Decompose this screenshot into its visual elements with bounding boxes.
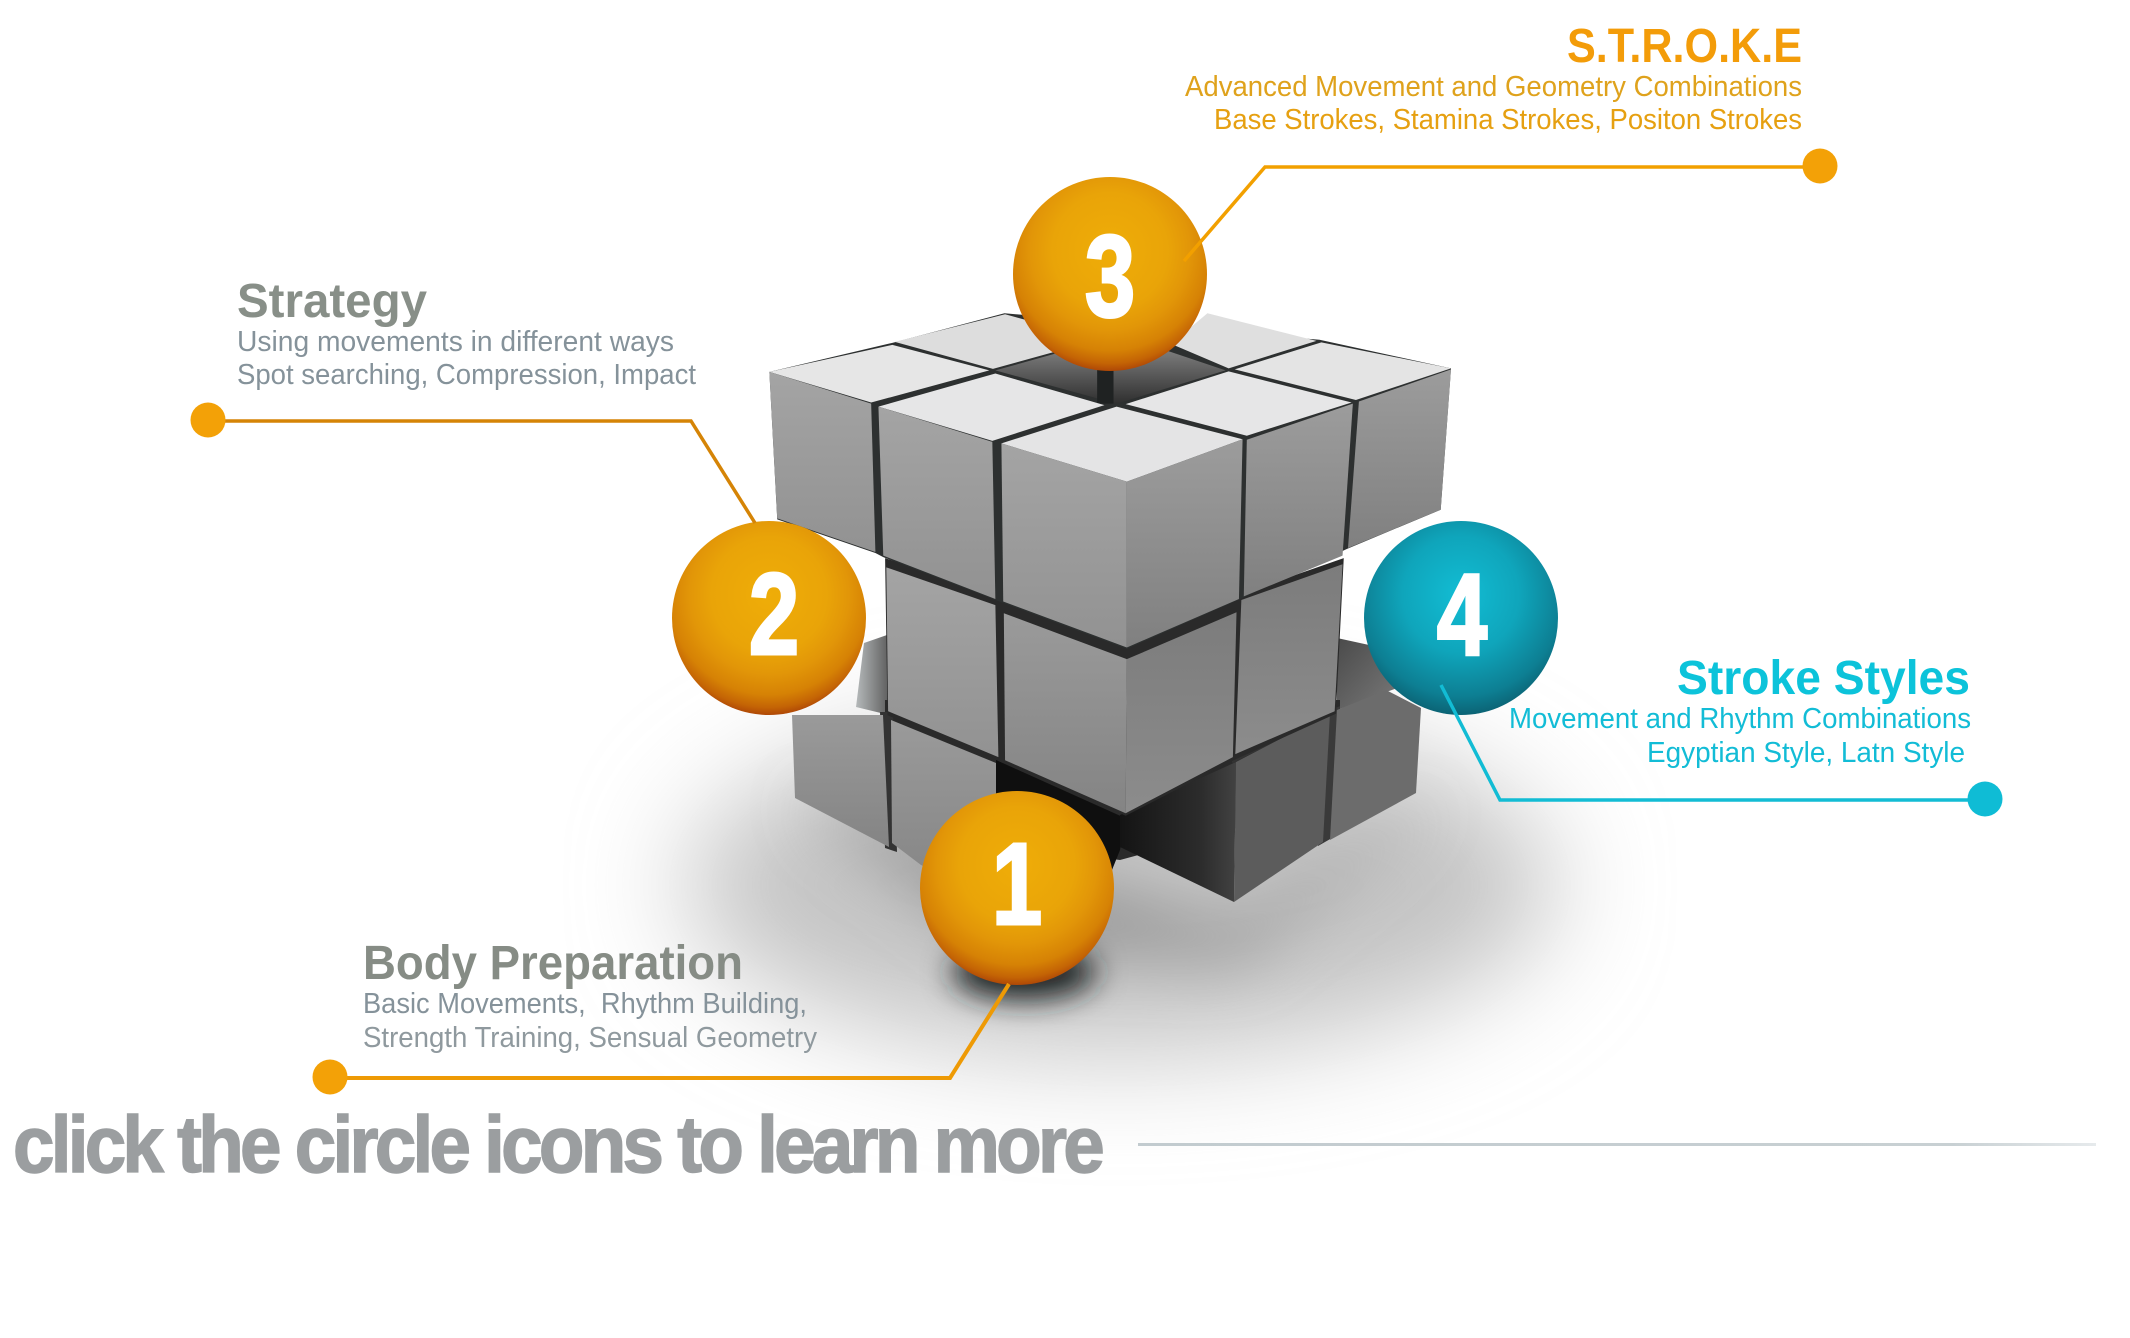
label: S.T.R.O.K.E: Base Strokes, Stamina Strokes, Positon Strokes [1214, 104, 1802, 136]
label: Strategy: Using movements in different ways [237, 326, 674, 358]
connector 4 [1441, 685, 2002, 816]
connector 2 [190, 402, 755, 523]
sphere 4 [1364, 521, 1558, 715]
label: Stroke Styles: Movement and Rhythm Combinations [1509, 703, 1971, 735]
label: Strategy [237, 275, 696, 391]
icon: 3D cube [769, 313, 1451, 902]
connector 1 [312, 984, 1009, 1094]
connector 3 [1184, 148, 1838, 261]
label: Strategy: Spot searching, Compression, Impact [237, 359, 696, 391]
call to action: click the circle icons to learn more [13, 1100, 1102, 1189]
sphere 2 [672, 521, 866, 715]
label: Body Preparation: Body Preparation [363, 937, 743, 990]
label: S.T.R.O.K.E: S.T.R.O.K.E [1567, 20, 1802, 73]
sphere 3 [1013, 177, 1207, 371]
label: Stroke Styles: Stroke Styles [1677, 652, 1970, 705]
number 2: 2 [749, 550, 799, 680]
label: S.T.R.O.K.E: Advanced Movement and Geometry Combinations [1185, 71, 1802, 103]
label: Stroke Styles [1509, 652, 1971, 769]
sphere 1 [920, 791, 1114, 985]
shadow under sphere 1 [952, 944, 1096, 1000]
label: Body Preparation [363, 937, 817, 1054]
number 3: 3 [1085, 212, 1135, 342]
number 4: 4 [1437, 551, 1487, 681]
label: Body Preparation: Strength Training, Sensual Geometry [363, 1022, 817, 1054]
label: Strategy: Strategy [237, 275, 427, 328]
cube top layer [769, 313, 1451, 649]
cube middle layer [885, 558, 1344, 816]
cube bottom layer [792, 635, 1421, 902]
label: Body Preparation: Basic Movements, Rhythm Building, [363, 988, 807, 1020]
label: S.T.R.O.K.E [1185, 20, 1802, 136]
cube drop shadow [685, 715, 1555, 1055]
number 1: 1 [992, 820, 1042, 950]
label: Stroke Styles: Egyptian Style, Latn Style [1647, 737, 1965, 769]
